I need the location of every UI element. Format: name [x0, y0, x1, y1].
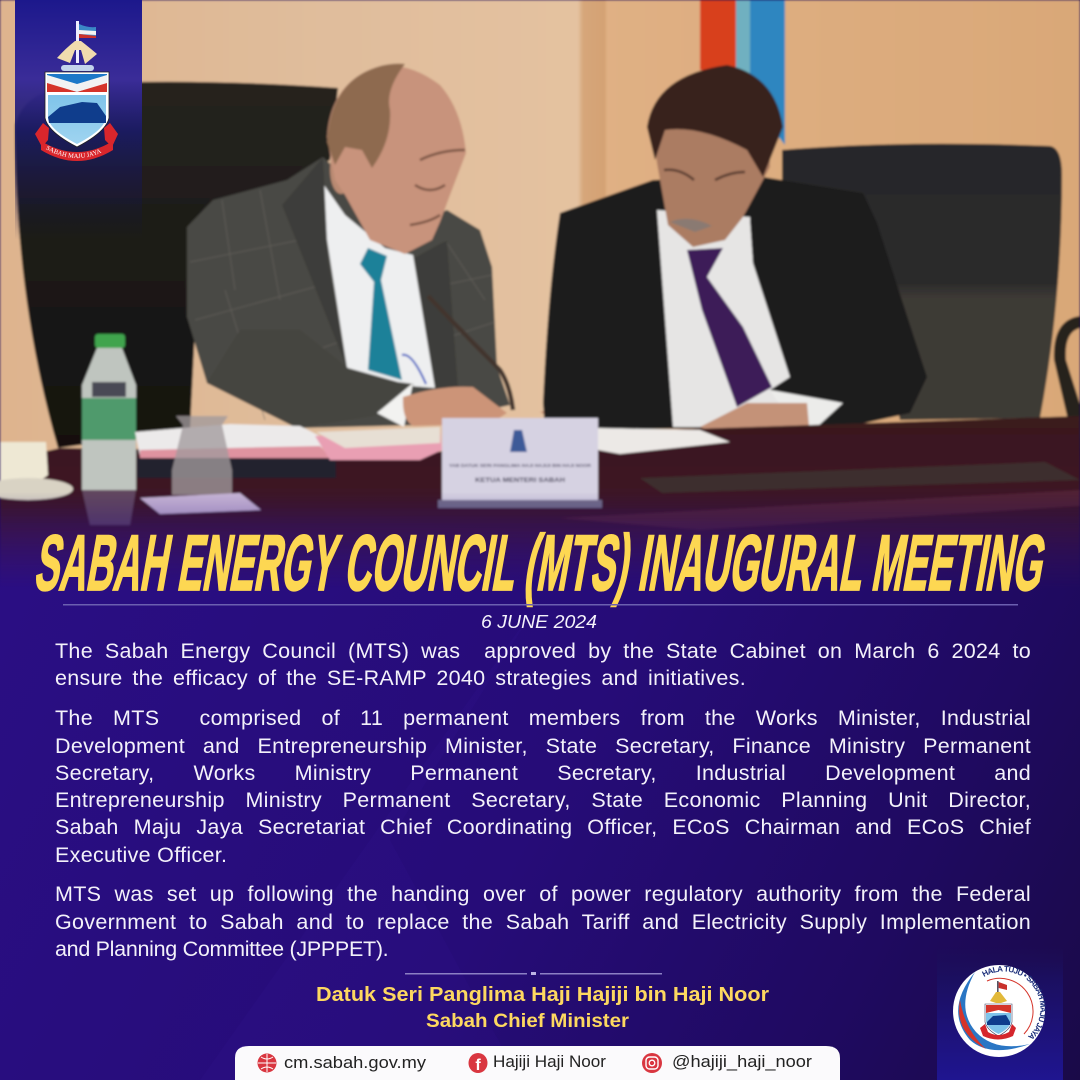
other hand: [540, 407, 606, 425]
nameplate: YAB DATUK SERI PANGLIMA HAJI HAJIJI BIN HAJI NOOR: [449, 463, 592, 468]
flag: [79, 24, 96, 38]
right lapel: [414, 240, 458, 388]
Sabah coat of arms: SABAH MAJU JAYA: [46, 146, 102, 158]
right man: [543, 65, 927, 442]
cuff: [377, 383, 413, 427]
meeting photo: [0, 0, 1080, 590]
suit arm edge: [750, 220, 860, 403]
logo panel bottom right: [937, 945, 1063, 1080]
signature divider: [405, 972, 662, 975]
social media footer bar: [235, 1046, 840, 1080]
Kinabalu mountain: [48, 102, 106, 123]
water glass: [172, 416, 232, 495]
paragraph 3: MTS was set up following the handing over of power regulatory authority from the Federal: [55, 882, 1031, 906]
paragraph 2: [55, 706, 1031, 867]
paper at right of nameplate: [598, 428, 730, 454]
suit: [543, 177, 927, 430]
purple gradient panel: [0, 490, 1080, 1080]
nameplate: [438, 418, 602, 508]
logo flag and crest: [997, 981, 999, 1001]
motto scroll: [35, 123, 118, 147]
paragraph 1: [55, 639, 1031, 690]
hand: [403, 387, 507, 426]
table: [0, 416, 1080, 590]
signatory title: Sabah Chief Minister: [426, 1011, 630, 1032]
paragraph 3: [55, 882, 1031, 961]
black pad: [640, 462, 1080, 493]
logo red arc: [987, 978, 1033, 1034]
instagram text: @hajiji_haji_noor: [672, 1053, 813, 1071]
icon: facebook: f: [475, 1057, 481, 1074]
ear: [330, 146, 352, 194]
body text: [55, 639, 1031, 961]
hands holding pole: [57, 41, 97, 64]
head: [327, 66, 466, 254]
napkin: [140, 493, 261, 514]
hair: [647, 65, 783, 177]
facebook text: Hajiji Haji Noor: [493, 1053, 607, 1071]
paragraph 2: The MTS comprised of 11 permanent members from the Works Minister, Industrial: [55, 706, 1031, 730]
flag pole: [76, 21, 79, 63]
shield: [45, 72, 109, 147]
paragraph 2: Secretary, Works Ministry Permanent Secretary, Industrial Development and: [55, 761, 1031, 785]
paragraph 2: Executive Officer.: [55, 843, 227, 867]
hand: [700, 403, 810, 442]
chair on far right edge: [1054, 316, 1080, 420]
microphone: [428, 296, 513, 410]
hair: [327, 64, 405, 168]
water bottle: [82, 334, 136, 525]
icon: website globe: [258, 1054, 276, 1072]
tie: [360, 248, 402, 380]
jacket check pattern: [190, 190, 495, 425]
sleeve: [207, 330, 414, 428]
logo swooshes: [958, 972, 1030, 1050]
paragraph 2: Development and Entrepreneurship Minister, State Secretary, Finance Ministry Permanent: [55, 734, 1031, 758]
head: [652, 125, 770, 247]
paragraph 2: Entrepreneurship Ministry Permanent Secretary, State Economic Planning Unit Director,: [55, 788, 1031, 812]
nameplate: KETUA MENTERI SABAH: [475, 478, 565, 484]
divider: [63, 604, 1018, 606]
blue pen mark: [402, 355, 426, 384]
wood wall: [0, 0, 1080, 590]
paragraph 1: The Sabah Energy Council (MTS) was approved by the State Cabinet on March 6 2024 to: [55, 639, 1031, 663]
facial features: [664, 170, 745, 180]
icon: instagram: [642, 1053, 662, 1073]
flags behind the men: [700, 0, 785, 145]
Sabah coat of arms: [35, 21, 118, 161]
round Hala Tuju logo: [953, 965, 1046, 1057]
website text: cm.sabah.gov.my: [284, 1054, 427, 1072]
right chair: [782, 144, 1062, 420]
paragraph 2: Sabah Maju Jaya Secretariat Chief Coordinating Officer, ECoS Chairman and ECoS Chief: [55, 815, 1031, 839]
jacket: [187, 157, 510, 428]
moustache: [670, 219, 712, 232]
shirt: [657, 210, 840, 427]
paragraph 3: Government to Sabah and to replace the Sabah Tariff and Electricity Supply Implementation: [55, 910, 1031, 934]
logo ring text: [984, 972, 1040, 1037]
table reflection: [560, 490, 1080, 530]
coffee cup: [0, 442, 73, 500]
paragraph 1: ensure the efficacy of the SE-RAMP 2040 strategies and initiatives.: [55, 666, 746, 690]
shirt: [317, 175, 435, 388]
paragraph 3: and Planning Committee (JPPPET).: [55, 937, 388, 961]
date: 6 JUNE 2024: [481, 612, 597, 632]
left man: [187, 64, 606, 428]
left chair: [15, 82, 338, 448]
background diagonal facets: [200, 600, 540, 1080]
logo band top left: [15, 0, 142, 240]
tie: [687, 248, 772, 407]
round Hala Tuju logo: HALA TUJU • SABAH MAJU JAYA: [982, 966, 1046, 1039]
icon: facebook: [468, 1053, 488, 1074]
beads: [61, 65, 94, 71]
left lapel: [282, 157, 347, 368]
documents: [135, 424, 442, 478]
facial features: [410, 150, 465, 225]
signatory name: Datuk Seri Panglima Haji Hajiji bin Haji Noor: [316, 984, 769, 1006]
cuff: [770, 390, 843, 427]
